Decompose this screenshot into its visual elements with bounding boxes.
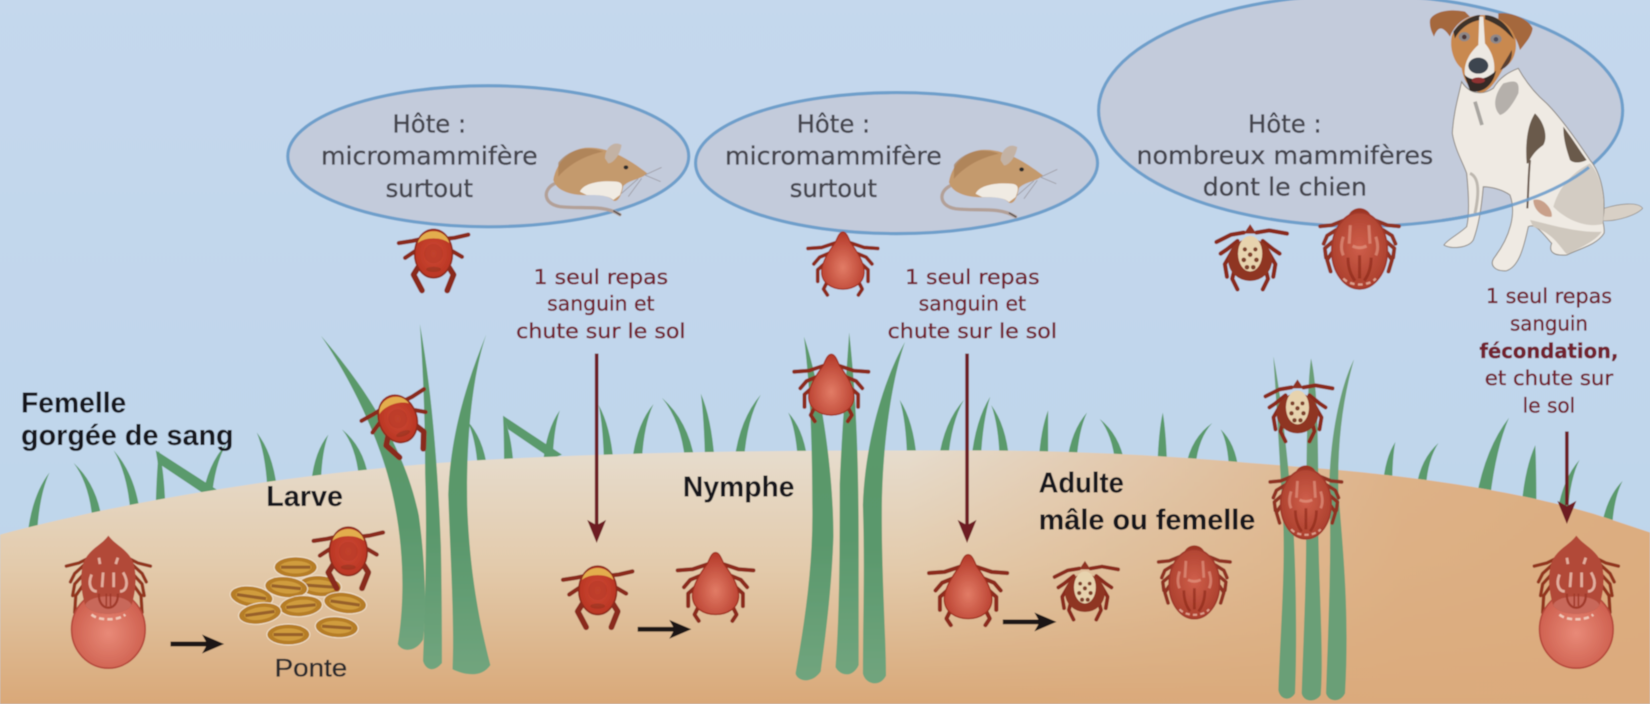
tick: male on host 3	[1216, 224, 1287, 289]
grass tuft 3	[1273, 357, 1354, 701]
arrow: larva meal fall	[587, 354, 606, 543]
tick: female waiting on grass	[1270, 465, 1342, 539]
tick: engorged female on soil	[66, 536, 150, 668]
arrow: adult meal fall	[1557, 431, 1576, 524]
host 3 caption: Hôte :	[1248, 110, 1322, 139]
label: engorged female: Femelle	[21, 388, 126, 420]
text: adult meal note: fécondation,	[1480, 339, 1618, 363]
label: adult: mâle ou femelle	[1039, 504, 1255, 536]
soil	[0, 450, 1650, 704]
grass tuft 1	[321, 324, 490, 674]
arrow: nymph meal fall	[958, 354, 977, 543]
host bubble 1: small mammal	[288, 86, 689, 227]
host 2 caption: micromammifère	[725, 142, 942, 171]
label: engorged female: gorgée de sang	[21, 420, 234, 452]
text: nymph meal note: sanguin et	[919, 291, 1026, 315]
arrow: female to eggs	[170, 635, 224, 653]
label: adult: Adulte	[1039, 467, 1124, 499]
host 1 caption: surtout	[386, 174, 473, 203]
label: nymph: Nymphe	[683, 472, 794, 504]
text: adult meal note: 1 seul repas	[1486, 284, 1612, 308]
tick: adult male on soil	[1055, 561, 1118, 620]
text: nymph meal note: chute sur le sol	[888, 319, 1057, 343]
tick: fed nymph on soil	[929, 555, 1007, 625]
tick: male waiting on grass	[1265, 379, 1332, 441]
tick: adult female on soil	[1159, 545, 1230, 619]
background grass: small blades behind the soil	[27, 394, 1623, 537]
tick: larva on host 1	[399, 229, 468, 290]
text: adult meal note: et chute sur	[1485, 366, 1614, 390]
tick: engorged female after last meal	[1534, 536, 1618, 668]
tick: larva waiting on grass	[357, 384, 443, 465]
arrow: nymph to adult	[1003, 612, 1057, 631]
text: larva meal note: chute sur le sol	[516, 319, 686, 343]
label: eggs: Ponte	[275, 655, 347, 683]
icon: dog	[1430, 10, 1643, 271]
host 3 caption: nombreux mammifères	[1136, 141, 1433, 170]
tick: female on host 3	[1320, 208, 1399, 289]
host bubble 3: mammals including the dog	[1099, 0, 1623, 226]
icon: mouse	[942, 146, 1057, 217]
bubble outline crossing the dog	[1442, 167, 1589, 221]
host bubble 2: small mammal	[696, 93, 1098, 234]
host 1 caption: micromammifère	[321, 142, 538, 171]
eggs: ponte	[228, 556, 369, 646]
tick: nymph on soil	[678, 552, 753, 621]
icon: mouse	[546, 143, 662, 215]
text: larva meal note: sanguin et	[547, 291, 655, 315]
tick: nymph on host 2	[808, 232, 878, 295]
host 1 caption: Hôte :	[393, 110, 466, 139]
text: larva meal note: 1 seul repas	[534, 265, 668, 289]
text: adult meal note: sanguin	[1510, 311, 1588, 335]
tick: fed larva on soil	[563, 566, 632, 627]
arrow: larva to nymph	[638, 620, 691, 639]
host 2 caption: surtout	[790, 174, 877, 203]
text: adult meal note: le sol	[1523, 394, 1575, 418]
tick: larva beside eggs	[314, 527, 383, 588]
grass tuft 2	[796, 333, 905, 683]
host 3 caption: dont le chien	[1203, 173, 1367, 202]
label: larva: Larve	[266, 481, 343, 513]
tick: nymph waiting on grass	[794, 354, 868, 421]
text: nymph meal note: 1 seul repas	[905, 265, 1040, 289]
host 2 caption: Hôte :	[797, 110, 870, 139]
